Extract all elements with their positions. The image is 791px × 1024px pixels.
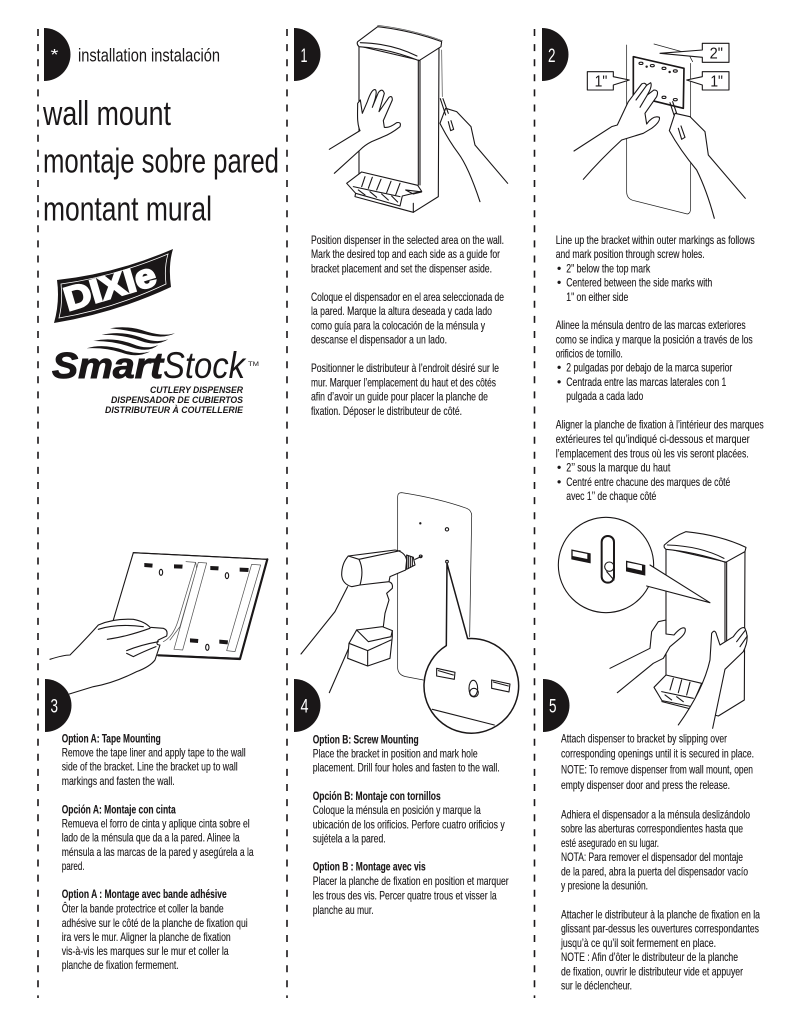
text: step 4 instructions: ubicación de los orificios. Perfore cuatro orificios y — [313, 817, 505, 831]
text: step 5 instructions: jusqu’à ce qu’il soit fermement en place. — [560, 936, 716, 950]
text: step 4 instructions: Option B : Montage avec vis — [313, 860, 426, 874]
text: step 2 instructions: • — [557, 262, 561, 276]
title: montant mural — [43, 190, 212, 228]
logo: SmartStock wordmark: TM — [248, 361, 259, 368]
text: step 4 instructions: Coloque la ménsula en posición y marque la — [313, 803, 481, 817]
illustration: attaching dispenser with detail circle — [558, 517, 747, 728]
section label: installation instalación — [78, 46, 220, 66]
text: step 3 instructions: adhésive sur le côté de la planche de fixation qui — [62, 916, 248, 930]
text: step 3 instructions: markings and fasten the wall. — [62, 774, 175, 788]
text: step 1 instructions: la pared. Marque la altura deseada y cada lado — [311, 304, 492, 318]
text: step 2 instructions: Centered between the side marks with — [566, 276, 712, 290]
text: step 2 instructions: pulgada a cada lado — [566, 389, 644, 403]
text: step 3 instructions: Remove the tape liner and apply tape to the wall — [62, 745, 246, 759]
text: step 1 instructions: descanse el dispensador a un lado. — [311, 332, 447, 346]
panel: title and branding — [42, 28, 279, 416]
illustration: dispenser held against wall — [329, 25, 508, 212]
text: step 3 instructions: lado de la ménsula que da a la pared. Alinee la — [62, 831, 240, 845]
title — [42, 95, 279, 228]
logo: SmartStock wordmark: Smart — [52, 345, 165, 386]
panel: step 3 — [45, 553, 267, 972]
text: step 4 instructions: sujétela a la pared. — [313, 831, 386, 845]
text: step 4 instructions: placement. Drill four holes and fasten to the wall. — [313, 761, 500, 775]
text: step 4 instructions: Placer la planche de fixation en position et marquer — [313, 874, 509, 888]
text: step 1 instructions: bracket placement and set the dispenser aside. — [311, 262, 492, 276]
text: step 3 instructions: Ôter la bande protectrice et coller la bande — [62, 901, 224, 916]
text: step 5 instructions — [560, 731, 760, 992]
text: step 2 instructions: • — [557, 475, 561, 489]
text: step 2 instructions: 2" below the top mark — [566, 262, 651, 276]
product descriptor: CUTLERY DISPENSER — [150, 385, 243, 396]
text: step 4 instructions: Option B: Screw Mounting — [313, 732, 419, 746]
step number 3 — [45, 679, 72, 732]
step number 2: 2 — [548, 46, 556, 67]
text: step 3 instructions — [62, 731, 254, 972]
text: step 1 instructions: fixation. Déposer le distributeur de côté. — [311, 404, 462, 418]
panel: step 1 — [294, 25, 508, 418]
callout: 1 inch left — [587, 72, 629, 91]
text: step 2 instructions: and mark position through screw holes. — [556, 247, 705, 261]
step number 4 — [294, 679, 320, 732]
panel: step 5 — [543, 517, 760, 992]
text: step 2 instructions: • — [557, 375, 561, 389]
text: step 3 instructions: ménsula a las marcas de la pared y asegúrela a la — [62, 845, 254, 859]
panel: step 2 — [542, 28, 764, 503]
text: step 2 instructions: 1" on either side — [566, 290, 629, 304]
text: step 1 instructions: Position dispenser in the selected area on the wall. — [311, 233, 504, 247]
text: step 3 instructions: side of the bracket. Line the bracket up to wall — [62, 760, 238, 774]
text: step 1 instructions: Positionner le distributeur à l’endroit désiré sur le — [311, 361, 499, 375]
text: step 2 instructions: orificios de tornillo. — [556, 347, 623, 361]
text: step 2 instructions — [556, 233, 764, 503]
title: montaje sobre pared — [43, 142, 279, 180]
text: step 2 instructions: 2’’ sous la marque du haut — [566, 461, 671, 475]
step number 1: 1 — [300, 46, 308, 67]
logo: SmartStock wordmark: Stock — [163, 345, 247, 386]
text: step 2 instructions: Centré entre chacune des marques de côté — [566, 475, 731, 489]
text: step 3 instructions: Option A : Montage avec bande adhésive — [62, 887, 227, 901]
callout: 2 inch — [660, 43, 729, 62]
step number 2 — [542, 28, 568, 81]
text: step 3 instructions: vis-à-vis les marques sur le mur et coller la — [62, 944, 229, 958]
text: step 2 instructions: • — [557, 276, 561, 290]
callout: 1 inch right — [687, 72, 729, 91]
text: step 2 instructions: avec 1’’ de chaque côté — [566, 489, 657, 503]
text: step 2 instructions: • — [557, 361, 561, 375]
text: step 4 instructions — [313, 732, 509, 917]
step number 1 — [294, 28, 320, 81]
illustration: drilling holes with detail circle — [301, 493, 519, 733]
text: step 4 instructions: Place the bracket in position and mark hole — [313, 747, 478, 761]
section marker: asterisk — [44, 28, 70, 81]
text: step 1 instructions: mur. Marquer l’emplacement du haut et des côtés — [311, 376, 496, 390]
text: step 3 instructions: Option A: Tape Mounting — [62, 731, 161, 745]
text: step 5 instructions: y presione la desunión. — [561, 879, 648, 893]
detail circle — [424, 563, 519, 733]
illustration: applying tape to bracket — [50, 553, 267, 694]
text: step 4 instructions: les trous des vis. Percer quatre trous et visser la — [313, 889, 497, 903]
panel: step 4 — [294, 493, 519, 917]
product descriptor: DISPENSADOR DE CUBIERTOS — [111, 395, 244, 406]
step number 4: 4 — [300, 696, 309, 718]
step number 3: 3 — [50, 696, 58, 718]
section marker: asterisk: * — [50, 47, 58, 64]
text: step 5 instructions: esté asegurado en su lugar. — [561, 836, 659, 850]
callout: 1 inch left: 1" — [595, 74, 607, 91]
text: step 3 instructions: ira vers le mur. Aligner la planche de fixation — [62, 930, 231, 944]
step number 5 — [543, 679, 570, 732]
title: wall mount — [42, 95, 171, 133]
text: step 4 instructions: Opción B: Montaje con tornillos — [313, 789, 441, 803]
product descriptor: DISTRIBUTEUR À COUTELLERIE — [105, 405, 244, 416]
logo: Dixie — [54, 249, 173, 323]
text: step 2 instructions: 2 pulgadas por debajo de la marca superior — [566, 361, 732, 375]
logo: SmartStock wordmark — [52, 345, 259, 386]
step number 5: 5 — [549, 696, 556, 718]
text: step 1 instructions: como guía para la colocación de la ménsula y — [311, 318, 485, 332]
text: step 1 instructions: afin d’avoir un guide pour placer la planche de — [311, 390, 488, 404]
text: step 3 instructions: Opción A: Montaje con cinta — [62, 802, 176, 816]
logo: SmartStock waves — [87, 327, 175, 355]
callout: 2 inch: 2" — [710, 45, 723, 62]
detail circle — [558, 517, 710, 613]
text: step 1 instructions — [311, 233, 504, 418]
logo: Dixie: DIXIe — [59, 256, 160, 318]
text: step 5 instructions: sur le déclencheur. — [561, 978, 632, 992]
text: step 4 instructions: planche au mur. — [313, 903, 374, 917]
text: step 3 instructions: Remueva el forro de cinta y aplique cinta sobre el — [62, 817, 250, 831]
text: step 1 instructions: Coloque el dispensador en el area seleccionada de — [311, 290, 504, 304]
text: step 3 instructions: pared. — [62, 859, 85, 873]
callout: 1 inch right: 1" — [710, 74, 723, 91]
text: step 2 instructions: • — [557, 461, 561, 475]
product descriptor — [105, 385, 244, 416]
text: step 2 instructions: Centrada entre las marcas laterales con 1 — [566, 375, 727, 389]
illustration: bracket on wall with measurements — [574, 43, 745, 218]
text: step 1 instructions: Mark the desired top and each side as a guide for — [311, 247, 500, 261]
text: step 5 instructions: Attach dispenser to bracket by slipping over — [561, 731, 727, 745]
text: step 3 instructions: planche de fixation fermement. — [62, 958, 179, 972]
